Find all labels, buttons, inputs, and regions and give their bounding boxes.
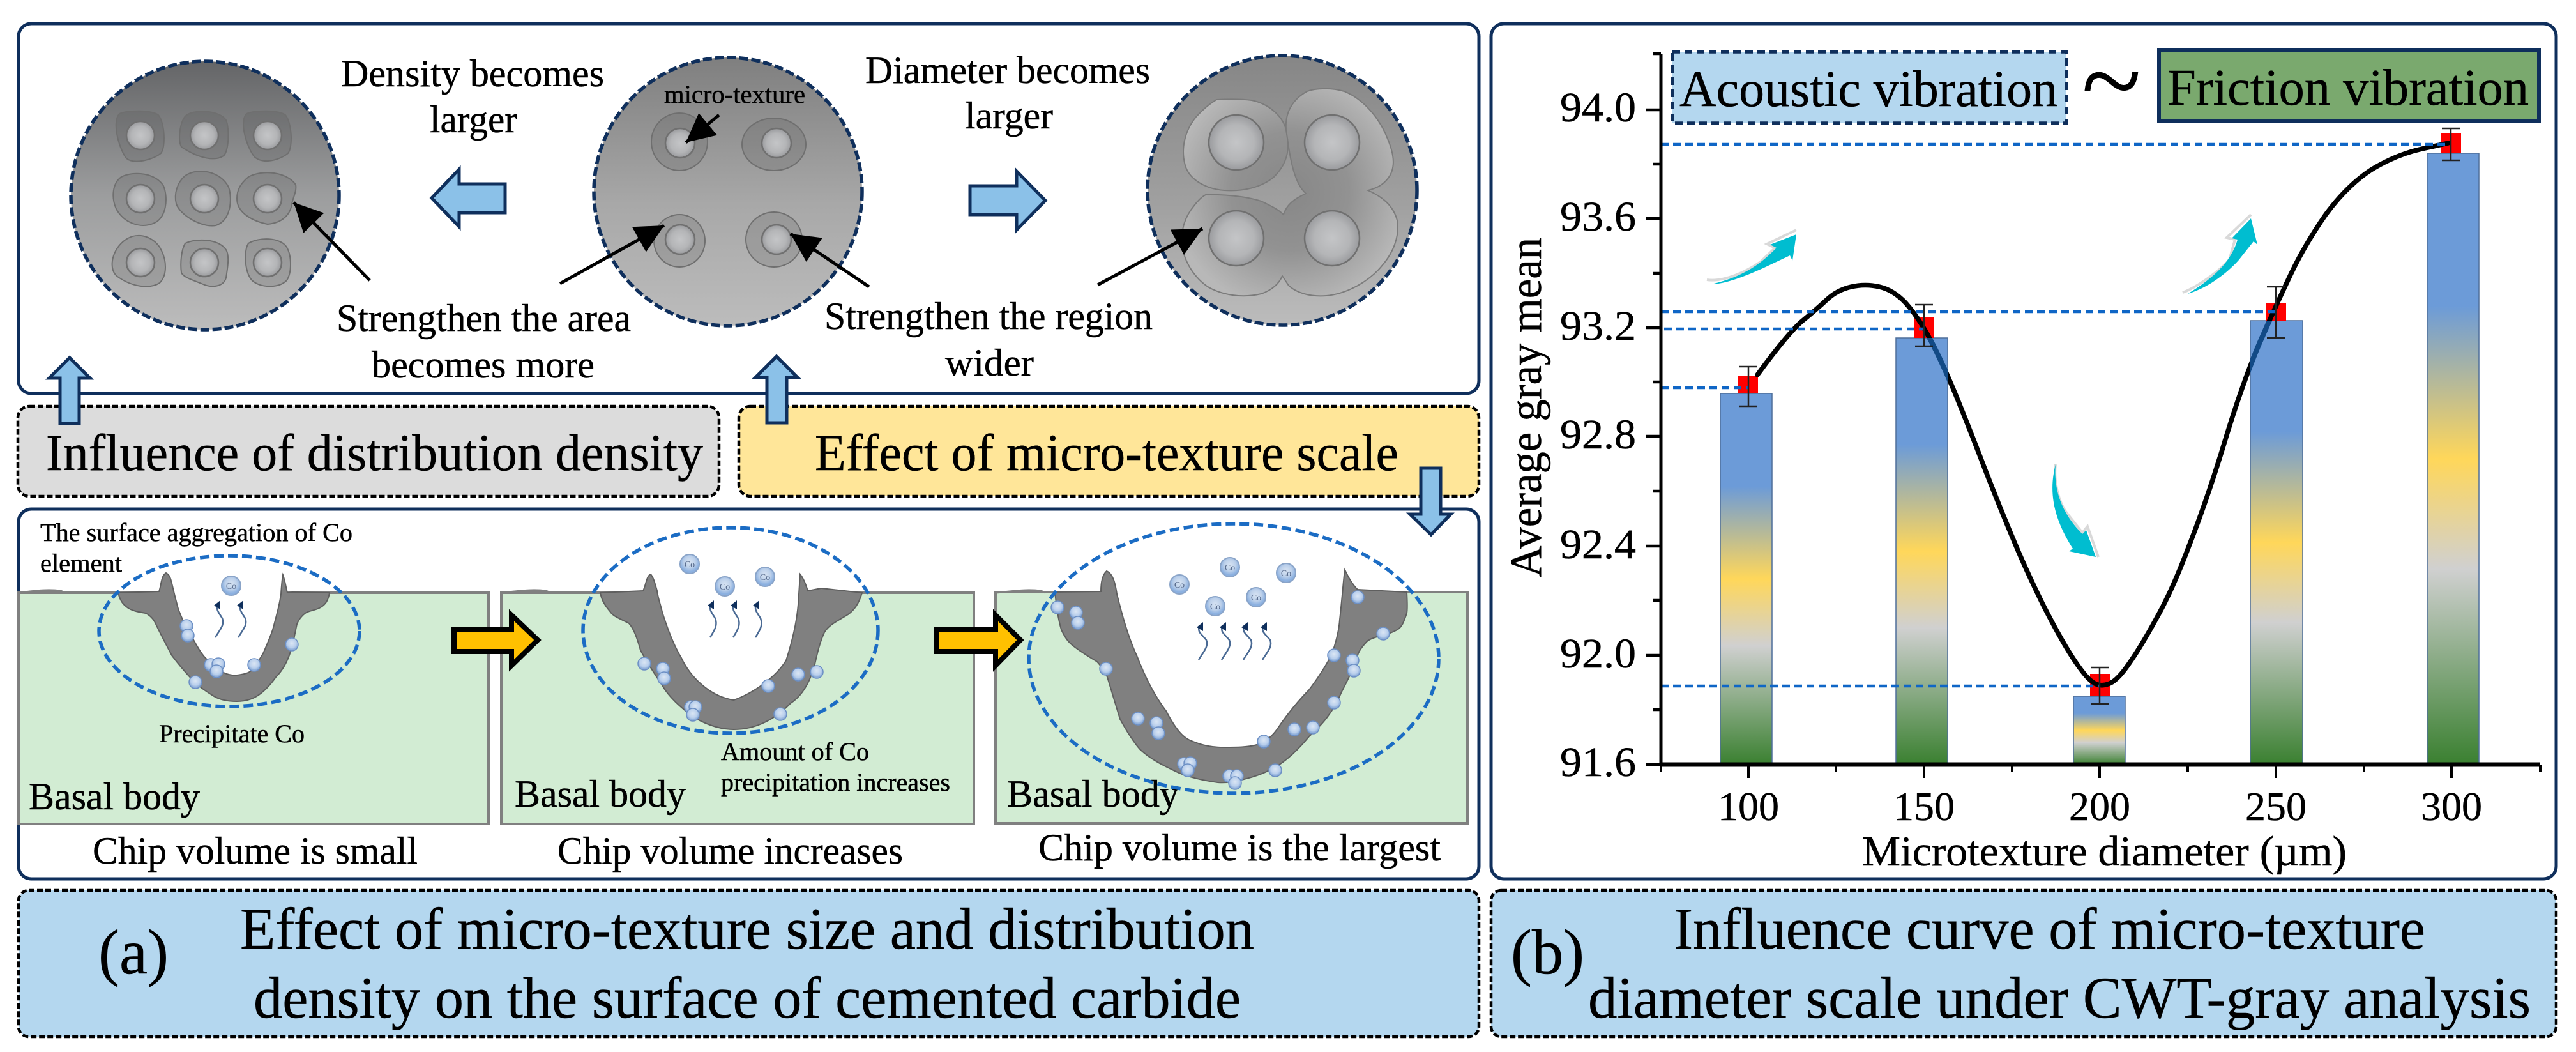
free Co particles: Co (720, 583, 730, 592)
bars (1720, 153, 2479, 765)
text: strengthen the area: becomes more (372, 344, 595, 386)
arrow: diameter increases (970, 171, 1045, 230)
panel: chip volume and Co precipitation (19, 509, 1479, 879)
free Co particles (222, 554, 1296, 616)
error bars (1739, 128, 2460, 704)
label box: effect of micro-texture scale: Effect of micro-texture scale (815, 423, 1398, 482)
text: surface aggregation: element (40, 549, 122, 577)
arrow: step 1 (454, 615, 538, 666)
caption (a): density on the surface of cemented carbide (254, 965, 1241, 1030)
text: surface aggregation (40, 518, 352, 577)
y axis tick labels: 92.4 (1560, 521, 1636, 568)
x axis tick labels: 150 (1893, 784, 1955, 829)
precipitated Co particles (180, 591, 1390, 789)
label box: influence of distribution density: Influence of distribution density (46, 423, 703, 482)
y axis tick labels: 93.2 (1560, 303, 1636, 349)
panel: influence chart (1491, 20, 2556, 879)
label box: effect of micro-texture scale (739, 406, 1479, 496)
caption (b) (1491, 890, 2556, 1037)
text: strengthen the region: Strengthen the region (824, 295, 1153, 337)
x axis tick labels: 200 (2069, 784, 2130, 829)
tilde relation: ~ (2082, 20, 2141, 142)
pit 2 (600, 556, 862, 729)
text: density becomes larger: larger (430, 98, 517, 141)
free Co particles: Co (1251, 593, 1261, 603)
caption (b): Influence curve of micro-texture (1674, 896, 2425, 961)
y axis tick labels: 94.0 (1560, 84, 1636, 131)
arrow: scale effect down (1410, 468, 1451, 535)
curve seen through bars (1927, 321, 2272, 382)
dashed ellipse 1 (99, 556, 360, 706)
text: strengthen the area: Strengthen the area (337, 297, 631, 339)
label: micro-texture: micro-texture (664, 80, 805, 109)
icon: dense texture disc (71, 61, 339, 330)
text: strengthen the area (337, 297, 631, 386)
x axis tick labels (1718, 784, 2482, 829)
label: basal body 1: Basal body (29, 775, 200, 818)
caption (b): diameter scale under CWT-gray analysis (1588, 965, 2531, 1030)
text: strengthen the region: wider (945, 342, 1034, 384)
text: precipitate Co: Precipitate Co (159, 719, 305, 748)
dashed reference lines (1661, 144, 2451, 686)
text: density becomes larger (341, 52, 604, 141)
text: diameter becomes larger: Diameter becomes (865, 49, 1150, 91)
free Co particles: Co (1281, 569, 1291, 579)
icon: large texture disc (1148, 56, 1417, 325)
arrow: teal falling (2052, 464, 2098, 557)
legend: acoustic vibration: Acoustic vibration (1679, 60, 2057, 118)
text: chip volume increases: Chip volume increases (557, 830, 903, 872)
label box: influence of distribution density (18, 406, 719, 496)
caption (a): (a) (98, 917, 169, 987)
label: basal body 3: Basal body (1007, 773, 1179, 815)
arrow: density up (49, 358, 90, 423)
text: diameter becomes larger (865, 49, 1150, 137)
y axis tick labels: 93.6 (1560, 194, 1636, 240)
arrow: step 2 (937, 615, 1020, 666)
caption (b): (b) (1511, 917, 1584, 987)
rising Co wavy arrows (214, 600, 1271, 660)
free Co particles: Co (685, 560, 695, 570)
free Co particles: Co (226, 582, 236, 591)
label: basal body 2: Basal body (515, 773, 686, 815)
pit 3 (1055, 543, 1407, 782)
dashed ellipse 3 (1029, 524, 1439, 793)
y axis tick labels (1560, 84, 1636, 786)
free Co particles: Co (1210, 602, 1220, 612)
curve (1757, 143, 2448, 685)
y axis title: Average gray mean (1501, 238, 1551, 577)
pit 1 (118, 562, 330, 701)
text: amount of Co precipitation: Amount of Co (721, 737, 869, 766)
arrow: teal rising 1 (1707, 230, 1796, 284)
arrow: teal rising 2 (2183, 215, 2257, 294)
text: amount of Co precipitation (721, 737, 950, 797)
x axis title: Microtexture diameter (µm) (1862, 828, 2347, 875)
basal body box 3 (996, 592, 1467, 823)
text: density becomes larger: Density becomes (341, 52, 604, 95)
icon: base texture disc (594, 57, 862, 326)
free Co particles: Co (760, 573, 770, 583)
text: chip volume largest: Chip volume is the largest (1038, 827, 1441, 869)
surface roughness lines (19, 590, 1045, 593)
text: surface aggregation: The surface aggregation of Co (40, 518, 352, 547)
x axis tick labels: 300 (2421, 784, 2482, 829)
arrow: density increases (432, 169, 505, 227)
text: diameter becomes larger: larger (965, 95, 1053, 137)
caption (a) (19, 890, 1479, 1037)
y axis tick labels: 92.0 (1560, 630, 1636, 677)
x axis tick labels: 250 (2245, 784, 2307, 829)
free Co particles: Co (1174, 581, 1185, 590)
x axis tick labels: 100 (1718, 784, 1779, 829)
caption (a): Effect of micro-texture size and distribution (240, 896, 1254, 961)
text: strengthen the region (824, 295, 1153, 384)
pointer arrows (294, 115, 1202, 287)
dashed ellipse 2 (583, 528, 878, 733)
data markers (1738, 133, 2461, 696)
basal body box 1 (19, 593, 489, 824)
free Co particles: Co (1225, 563, 1235, 573)
text: amount of Co precipitation: precipitation increases (721, 768, 950, 797)
legend: friction vibration: Friction vibration (2167, 59, 2529, 116)
text: chip volume small: Chip volume is small (93, 830, 418, 872)
y axis tick labels: 91.6 (1560, 739, 1636, 786)
panel: micro-texture diagrams (19, 24, 1479, 393)
basal body box 2 (501, 593, 974, 824)
axes (1646, 54, 2540, 778)
y axis tick labels: 92.8 (1560, 411, 1636, 458)
arrow: scale up (755, 356, 798, 423)
